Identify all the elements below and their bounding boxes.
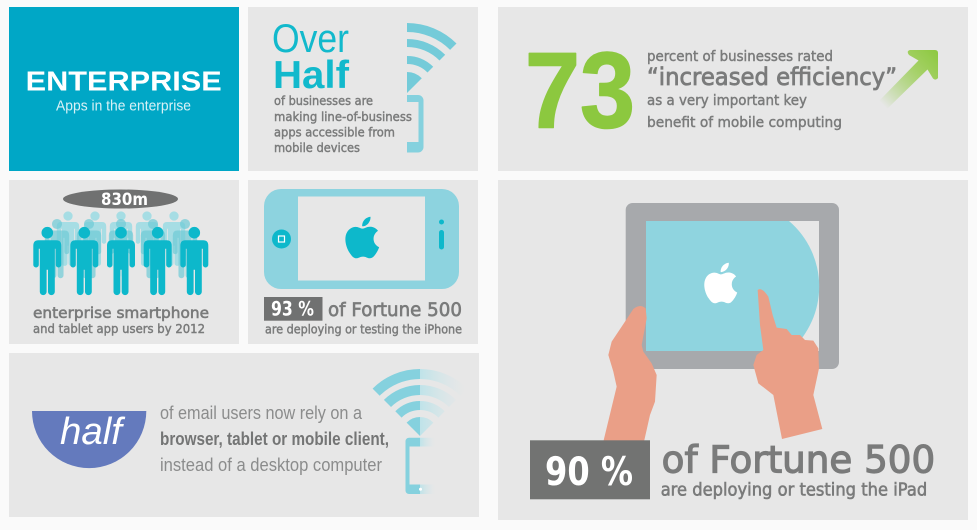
stat text: are deploying or testing the iPhone xyxy=(265,322,462,336)
half circle callout: half xyxy=(60,411,125,453)
description text: percent of businesses rated xyxy=(647,49,833,65)
description text: instead of a desktop computer xyxy=(160,454,382,475)
stat text: of Fortune 500 xyxy=(662,438,935,481)
stat badge: 93%: 93 % xyxy=(271,298,314,321)
panel: over half of businesses xyxy=(248,7,478,171)
stat text: are deploying or testing the iPad xyxy=(661,481,927,501)
figures: front row xyxy=(33,227,208,295)
panel: 90 percent iPad xyxy=(498,180,968,520)
body text: making line-of-business xyxy=(274,109,412,124)
panel: half of email users xyxy=(9,353,479,517)
stat text xyxy=(265,299,462,336)
arrow: rising xyxy=(879,50,938,109)
half circle callout xyxy=(32,411,146,468)
body text: mobile devices xyxy=(274,140,360,155)
description text: “increased efficiency” xyxy=(647,63,897,91)
panel: 93 percent iPhone xyxy=(248,180,478,344)
big number: 73 xyxy=(525,30,635,150)
panel: 830m users xyxy=(9,180,239,344)
panel: 73 percent efficiency xyxy=(498,7,968,171)
title: ENTERPRISE xyxy=(26,66,222,97)
icon: wifi signal with half phone xyxy=(407,23,456,152)
description text: benefit of mobile computing xyxy=(647,115,842,131)
caption xyxy=(33,304,209,336)
figures: back row xyxy=(57,211,185,266)
description text xyxy=(647,49,897,131)
subtitle: Apps in the enterprise xyxy=(56,99,191,115)
body text xyxy=(274,93,412,155)
stat badge: 90%: 90 % xyxy=(545,450,633,495)
body text: apps accessible from xyxy=(274,124,395,140)
panel: enterprise title xyxy=(9,7,239,171)
caption: and tablet app users by 2012 xyxy=(33,321,205,336)
callout: 830m: 830m xyxy=(101,190,148,209)
icon: iPhone xyxy=(264,189,459,289)
body text: of businesses are xyxy=(274,93,373,108)
heading: over: Over xyxy=(272,17,349,61)
heading: half: Half xyxy=(273,54,350,97)
description text: as a very important key xyxy=(647,93,807,109)
callout: 830m xyxy=(63,190,178,209)
stat text: of Fortune 500 xyxy=(328,299,462,321)
description text: browser, tablet or mobile client, xyxy=(160,428,389,449)
figures: middle row xyxy=(45,219,197,278)
description text: of email users now rely on a xyxy=(160,402,363,423)
description text xyxy=(160,402,389,475)
stat text xyxy=(661,438,935,501)
icon: wifi and fading phone xyxy=(373,369,467,494)
caption: enterprise smartphone xyxy=(33,304,209,322)
stat badge: 90% xyxy=(530,440,650,499)
icon: iPad with hands xyxy=(603,203,839,442)
